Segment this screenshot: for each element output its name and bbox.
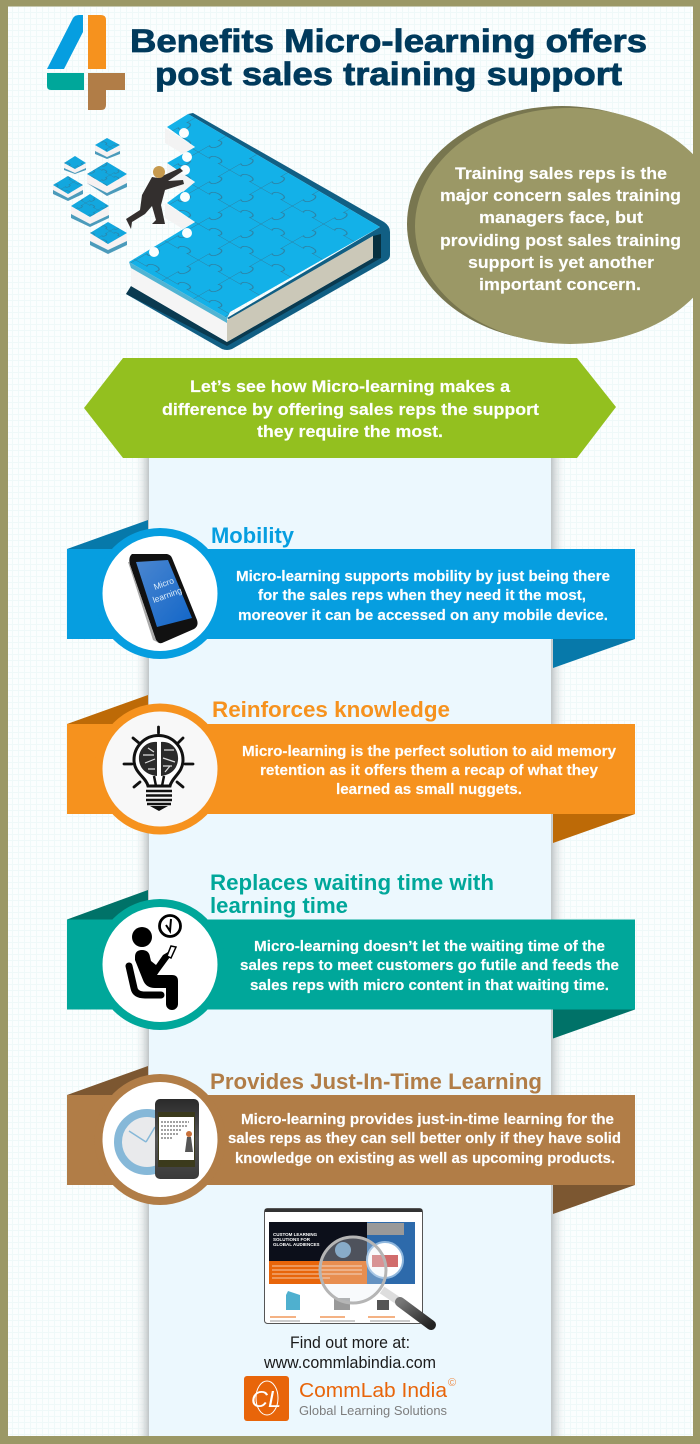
panel: mobility xyxy=(67,520,635,668)
CommLab India logo: CL xyxy=(251,1386,281,1412)
text: mobility: for the sales reps when they need it the most, xyxy=(258,587,586,604)
text: replaces waiting time: sales reps with micro content in that waiting time. xyxy=(250,977,609,994)
icon: clock and smartphone xyxy=(118,1099,199,1179)
website screenshot with magnifier: CUSTOM LEARNING xyxy=(273,1232,318,1237)
icon: tablet phone: Micro xyxy=(152,575,175,592)
heading: replaces waiting time: Replaces waiting time with xyxy=(210,870,494,895)
CommLab India logo: © xyxy=(448,1377,456,1389)
CommLab India logo: CommLab India xyxy=(299,1380,448,1402)
intro ellipse callout: major concern sales training xyxy=(440,186,681,205)
text: reinforces knowledge: retention as it offers them a recap of what they xyxy=(260,762,599,779)
heading: mobility: Mobility xyxy=(211,523,294,548)
icon: person waiting with phone xyxy=(129,916,180,1010)
text: mobility: Micro-learning supports mobility by just being there xyxy=(236,568,610,585)
center column xyxy=(134,458,567,1436)
text: reinforces knowledge: learned as small nuggets. xyxy=(336,781,522,798)
website screenshot with magnifier: GLOBAL AUDIENCES xyxy=(273,1242,320,1247)
website screenshot with magnifier xyxy=(264,1208,431,1325)
intro ellipse callout xyxy=(407,106,700,344)
icon: tablet phone: learning xyxy=(151,585,183,605)
find out more text xyxy=(263,1334,436,1372)
green intro banner xyxy=(84,358,616,458)
heading: replaces waiting time: learning time xyxy=(210,893,348,918)
panel: replaces waiting time xyxy=(67,870,635,1038)
icon: brain light bulb xyxy=(124,727,193,811)
text: just-in-time learning xyxy=(228,1111,621,1167)
green intro banner: Let’s see how Micro-learning makes a xyxy=(190,377,511,396)
find out more text: www.commlabindia.com xyxy=(263,1354,436,1372)
website screenshot with magnifier: SOLUTIONS FOR xyxy=(273,1237,311,1242)
text: replaces waiting time: Micro-learning doesn’t let the waiting time of the xyxy=(254,938,605,955)
text: mobility: moreover it can be accessed on any mobile device. xyxy=(238,607,608,624)
title xyxy=(130,23,647,92)
illustration: man pushing puzzle piece xyxy=(126,166,184,229)
CommLab India logo: Global Learning Solutions xyxy=(299,1403,447,1418)
illustration: loose puzzle pieces xyxy=(53,138,127,254)
green intro banner: they require the most. xyxy=(257,422,443,441)
puzzle lines xyxy=(129,114,380,318)
CommLab India logo xyxy=(244,1376,456,1421)
text: replaces waiting time: sales reps to meet customers go futile and feeds the xyxy=(240,957,619,974)
heading: just-in-time learning: Provides Just-In-Time Learning xyxy=(210,1069,542,1094)
text: replaces waiting time xyxy=(240,938,619,994)
intro ellipse callout: support is yet another xyxy=(468,253,654,272)
intro ellipse callout: Training sales reps is the xyxy=(455,164,667,183)
text: just-in-time learning: knowledge on existing as well as upcoming products. xyxy=(235,1150,615,1167)
text: reinforces knowledge xyxy=(242,743,617,798)
intro ellipse callout: important concern. xyxy=(479,275,641,294)
icon: number 4 logo xyxy=(47,15,125,110)
illustration: puzzle book xyxy=(126,113,390,350)
icon: tablet phone xyxy=(128,554,198,643)
panel: reinforces knowledge xyxy=(67,695,635,843)
find out more text: Find out more at: xyxy=(290,1334,410,1352)
title: post sales training support xyxy=(155,56,622,92)
text: just-in-time learning: sales reps as they can sell better only if they have solid xyxy=(228,1130,621,1147)
text: just-in-time learning: Micro-learning provides just-in-time learning for the xyxy=(241,1111,614,1128)
text: reinforces knowledge: Micro-learning is the perfect solution to aid memory xyxy=(242,743,617,760)
panel: just-in-time learning xyxy=(67,1066,635,1214)
text: mobility xyxy=(236,568,610,624)
green intro banner: difference by offering sales reps the support xyxy=(162,400,539,419)
intro ellipse callout: providing post sales training xyxy=(440,231,681,250)
intro ellipse callout: managers face, but xyxy=(479,208,643,227)
heading: replaces waiting time xyxy=(210,870,494,918)
title: Benefits Micro-learning offers xyxy=(130,23,647,59)
pieces removed xyxy=(165,128,195,154)
heading: reinforces knowledge: Reinforces knowledge xyxy=(212,697,450,722)
